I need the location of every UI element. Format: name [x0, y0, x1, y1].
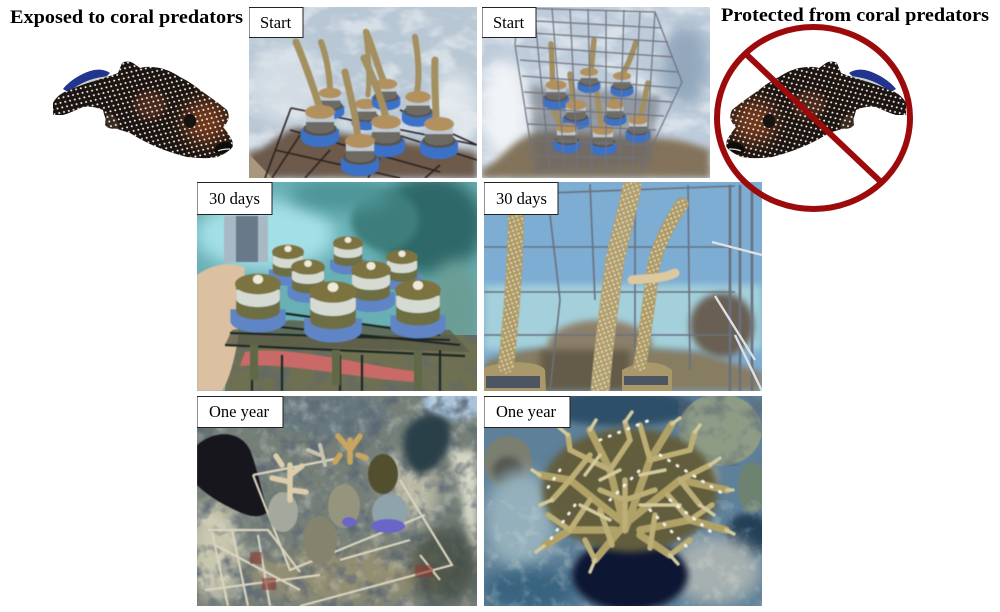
photo: branching corals seen through cage mesh: [484, 182, 762, 392]
photo: corals inside a wire cage on a rock: [481, 7, 710, 178]
label: 30 days: [484, 182, 558, 214]
icon: mirrored pufferfish: [724, 60, 909, 160]
icon: prohibited pufferfish: [717, 27, 910, 209]
label: start: Start: [493, 13, 525, 32]
panel: exposed, 30 days: [195, 175, 485, 395]
panel: exposed, start: [249, 7, 479, 178]
label: 30 days: 30 days: [496, 189, 547, 208]
heading: exposed to coral predators: Exposed to coral predators: [10, 7, 243, 28]
photo: overgrown rack with small damaged corals: [197, 396, 477, 606]
panel: protected, start: [481, 7, 710, 178]
label: start: [482, 8, 536, 38]
label: 30 days: [197, 182, 272, 214]
panel: exposed, one year: [197, 396, 477, 606]
photo: large branching coral colony on reef: [482, 390, 770, 612]
icon: pufferfish predator: [50, 60, 235, 160]
label: one year: [197, 396, 283, 428]
panel: protected, 30 days: [484, 182, 762, 392]
label: one year: One year: [496, 402, 557, 421]
label: one year: One year: [209, 402, 270, 421]
label: start: [249, 8, 303, 38]
label: start: Start: [260, 13, 292, 32]
icon: red prohibition sign: [717, 27, 910, 209]
heading: protected from coral predators: Protected from coral predators: [721, 5, 989, 26]
panel: protected, one year: [482, 390, 770, 612]
photo: sand floor and coral nubbins on a rack: [249, 7, 479, 178]
label: 30 days: 30 days: [209, 189, 260, 208]
photo: coral cans on a rack, hand and ruler at left: [195, 175, 485, 395]
label: one year: [484, 396, 570, 428]
